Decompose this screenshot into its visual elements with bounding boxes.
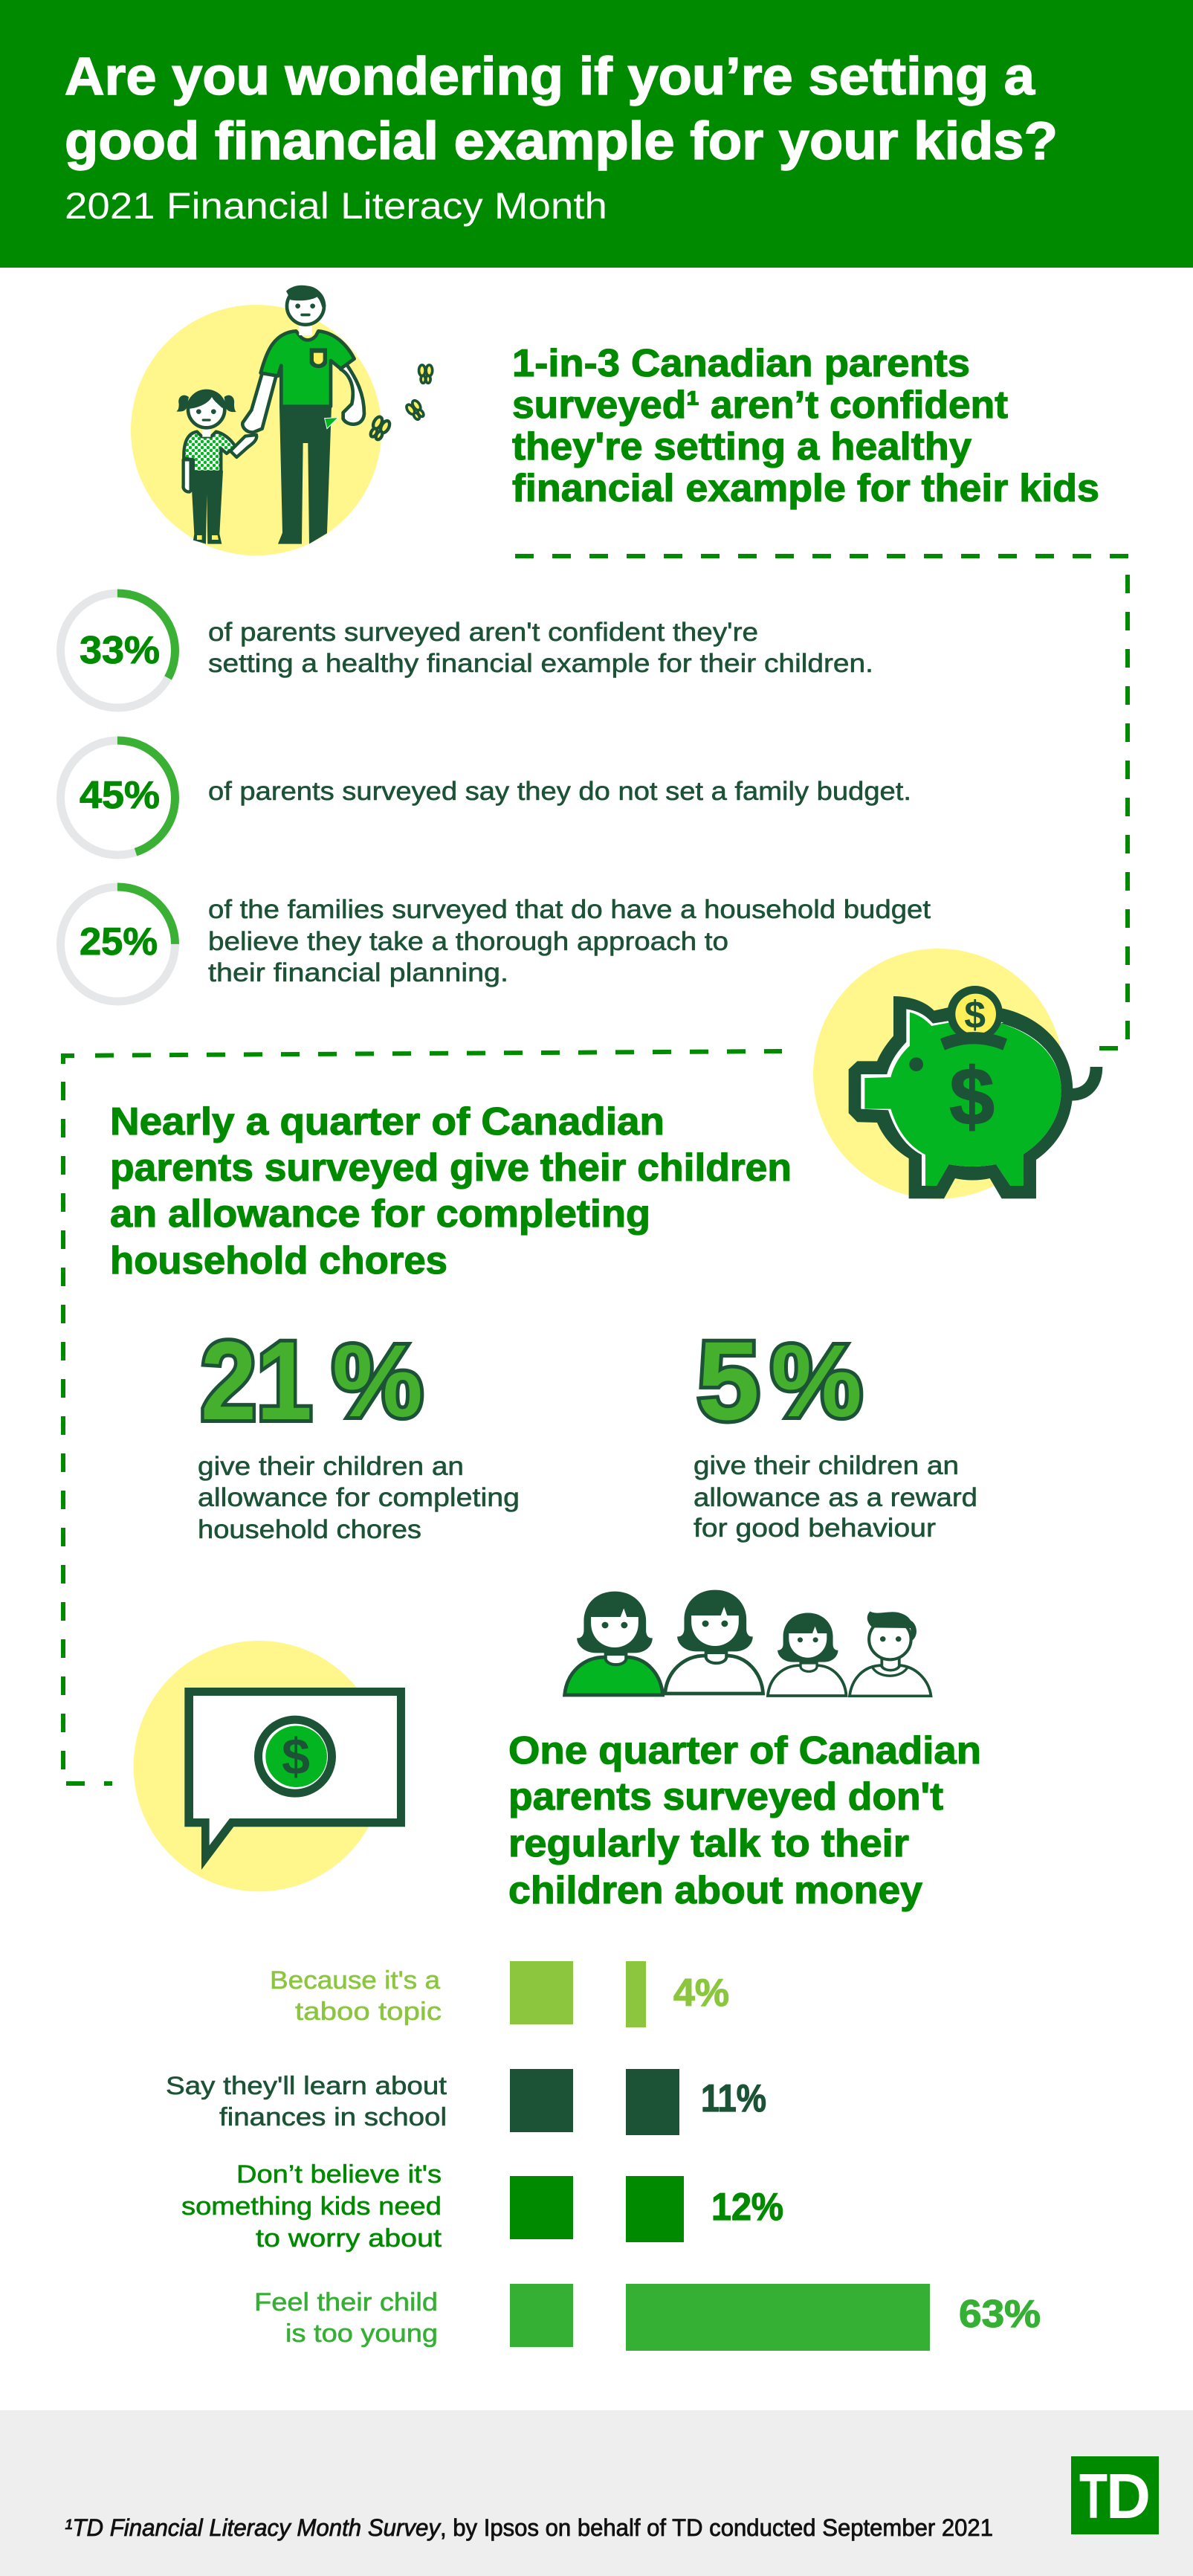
- footnote: [65, 2514, 993, 2541]
- bar row: child too young 63%: 63%: [959, 2293, 1041, 2336]
- title: good financial example for your kids?: [65, 112, 1058, 171]
- icon: speech bubble with dollar coin: [134, 1641, 405, 1891]
- stat: 33%: [61, 593, 873, 708]
- big number 5%: %: [771, 1324, 862, 1439]
- dollar sign: $: [282, 1729, 310, 1786]
- bar row: taboo topic 4%: taboo topic: [295, 1998, 442, 2026]
- heading: nearly a quarter: parents surveyed give their children: [110, 1146, 792, 1189]
- bar row: learn in school 11%: 11%: [701, 2077, 766, 2120]
- description: give their children an: [694, 1451, 959, 1480]
- big number 5%: [697, 1318, 862, 1443]
- description: setting a healthy financial example for their children.: [208, 649, 873, 678]
- description: their financial planning.: [208, 958, 508, 987]
- heading: 1-in-3 parents: [512, 342, 1099, 510]
- description: for good behaviour: [694, 1514, 936, 1543]
- value 45%: 45%: [80, 774, 160, 817]
- bar row: taboo topic 4%: [270, 1961, 729, 2027]
- footnote: , by Ipsos on behalf of TD conducted September 2021: [440, 2514, 993, 2541]
- description: [208, 618, 873, 678]
- description: of parents surveyed aren't confident they're: [208, 618, 758, 647]
- heading: one quarter: regularly talk to their: [508, 1822, 909, 1865]
- footnote: ¹TD Financial Literacy Month Survey: [65, 2514, 442, 2541]
- description: of the families surveyed that do have a household budget: [208, 895, 931, 924]
- ring chart 45%: [61, 740, 175, 855]
- logo: TD: [1071, 2456, 1159, 2534]
- description: give their children an: [198, 1452, 464, 1481]
- bar row: learn in school 11%: finances in school: [219, 2103, 447, 2131]
- bar row: learn in school 11%: [166, 2069, 766, 2135]
- icon: butterfly: [367, 416, 392, 442]
- stat: 45%: [61, 740, 911, 855]
- icon: family of four: [565, 1590, 931, 1696]
- bar row: not something to worry about 12%: something kids need: [181, 2192, 442, 2221]
- big number 21%: 21: [201, 1318, 312, 1443]
- person: mother: [565, 1592, 663, 1695]
- heading: one quarter: [508, 1729, 981, 1912]
- bar row: learn in school 11%: Say they'll learn about: [166, 2072, 447, 2100]
- footer: [0, 2410, 1193, 2576]
- stat: 5%: [694, 1318, 977, 1543]
- icon: butterfly: [405, 399, 427, 422]
- heading: 1-in-3 parents: surveyed¹ aren’t confident: [512, 384, 1008, 427]
- heading: nearly a quarter: an allowance for completing: [110, 1192, 650, 1236]
- icon: butterfly: [419, 365, 433, 383]
- heading: one quarter: parents surveyed don't: [508, 1775, 943, 1818]
- heading: nearly a quarter: Nearly a quarter of Canadian: [110, 1100, 665, 1143]
- dollar on body: $: [950, 1052, 995, 1142]
- heading: one quarter: children about money: [508, 1869, 922, 1912]
- description: believe they take a thorough approach to: [208, 927, 728, 956]
- big number 21%: %: [332, 1324, 423, 1439]
- ring chart 33%: [61, 593, 175, 708]
- value 25%: 25%: [80, 920, 158, 963]
- bar row: not something to worry about 12%: [181, 2160, 783, 2253]
- description: of parents surveyed say they do not set a family budget.: [208, 777, 911, 806]
- icon: father: [242, 285, 364, 544]
- bar row: child too young 63%: Feel their child: [254, 2288, 438, 2317]
- stat: 25%: [61, 887, 931, 1001]
- logo: TD: T: [1079, 2462, 1108, 2532]
- bar row: taboo topic 4%: 4%: [673, 1972, 729, 2015]
- person: girl: [768, 1613, 846, 1696]
- description: allowance for completing: [198, 1483, 520, 1512]
- description: household chores: [198, 1515, 421, 1544]
- person: father: [665, 1590, 763, 1694]
- value 33%: 33%: [80, 629, 160, 672]
- dashed connector: left: [61, 1051, 782, 1783]
- big number 5%: 5: [697, 1318, 760, 1443]
- heading: 1-in-3 parents: 1-in-3 Canadian parents: [512, 342, 970, 385]
- bar row: not something to worry about 12%: to worry about: [256, 2224, 442, 2253]
- description: allowance as a reward: [694, 1483, 977, 1512]
- stat: 21%: [198, 1318, 520, 1544]
- bar row: not something to worry about 12%: 12%: [711, 2186, 783, 2229]
- illustration: parent and child with butterflies: [131, 285, 433, 555]
- bar row: child too young 63%: [254, 2284, 1041, 2351]
- heading: 1-in-3 parents: financial example for their kids: [512, 467, 1099, 510]
- dashed connector: top right: [515, 556, 1130, 1048]
- person: boy: [850, 1611, 931, 1696]
- logo: TD: D: [1106, 2462, 1151, 2532]
- big number 21%: [201, 1318, 423, 1443]
- heading: 1-in-3 parents: they're setting a healthy: [512, 425, 971, 468]
- dollar on coin: $: [964, 993, 986, 1036]
- icon: daughter: [176, 390, 256, 544]
- description: [198, 1452, 520, 1544]
- header banner: [0, 0, 1193, 268]
- heading: nearly a quarter: [110, 1100, 792, 1282]
- title: [65, 48, 1058, 171]
- title: Are you wondering if you’re setting a: [65, 48, 1035, 106]
- ring chart 25%: [61, 887, 175, 1001]
- description: [208, 895, 931, 987]
- heading: one quarter: One quarter of Canadian: [508, 1729, 981, 1772]
- bar chart: reasons: [166, 1961, 1041, 2351]
- bar row: not something to worry about 12%: Don’t believe it's: [236, 2160, 442, 2189]
- bar row: taboo topic 4%: Because it's a: [270, 1966, 440, 1995]
- heading: nearly a quarter: household chores: [110, 1239, 447, 1282]
- bar row: child too young 63%: is too young: [285, 2320, 438, 2348]
- subtitle: 2021 Financial Literacy Month: [65, 185, 607, 227]
- icon: piggy bank: [813, 949, 1096, 1199]
- description: [694, 1451, 977, 1543]
